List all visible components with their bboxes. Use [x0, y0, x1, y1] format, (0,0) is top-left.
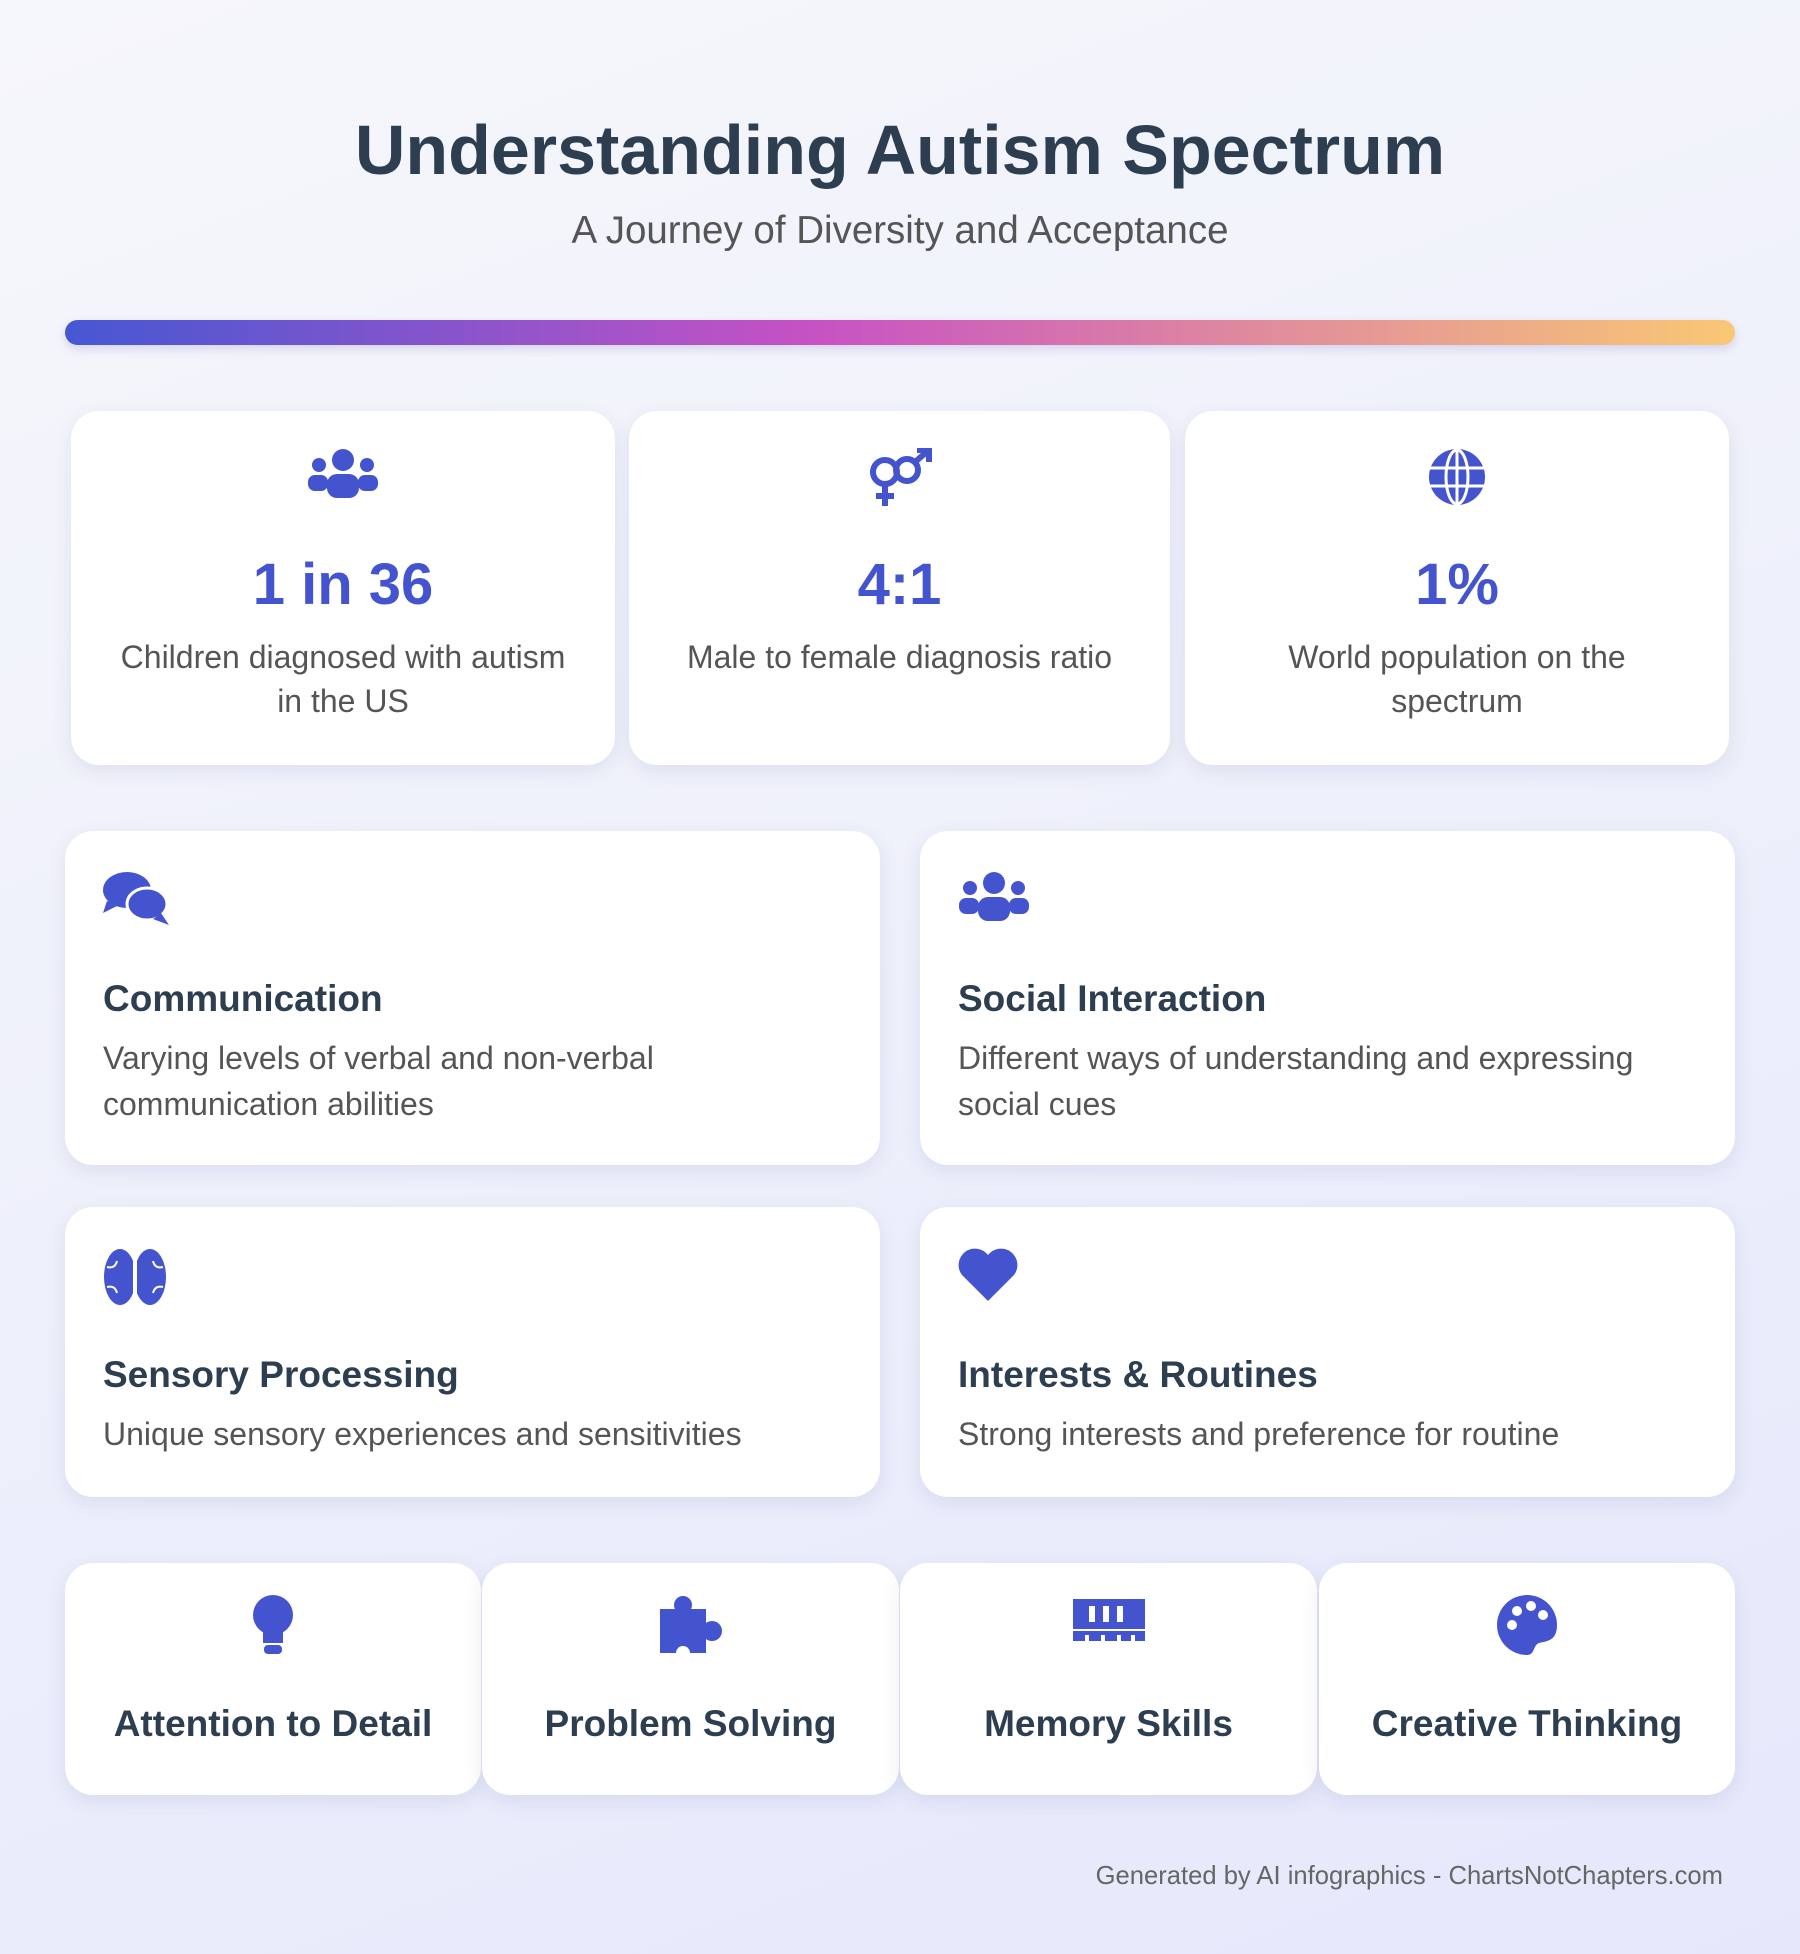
text: Unique sensory experiences and sensitivities	[103, 1416, 742, 1452]
strength card: problem solving	[482, 1563, 899, 1795]
label: Memory Skills	[984, 1703, 1233, 1744]
icon: lightbulb	[253, 1595, 293, 1654]
icon: memory chip	[1073, 1599, 1145, 1641]
feature card: sensory	[65, 1207, 880, 1497]
feature card: social	[920, 831, 1735, 1165]
footer: Generated by AI infographics - ChartsNotChapters.com	[1096, 1862, 1723, 1890]
text: Strong interests and preference for routine	[958, 1416, 1559, 1452]
text: Different ways of understanding and expressing social cues	[958, 1040, 1633, 1122]
icon: gender	[870, 448, 932, 506]
icon: puzzle	[660, 1596, 722, 1653]
stat card: 1 in 36	[71, 411, 615, 765]
icon: globe	[1429, 449, 1485, 505]
heading: Interests & Routines	[958, 1354, 1318, 1395]
strength card: memory	[900, 1563, 1317, 1795]
icon: people	[959, 872, 1029, 921]
number: 4:1	[858, 552, 941, 617]
number: 1%	[1415, 552, 1499, 617]
heading: Social Interaction	[958, 978, 1266, 1019]
feature card: communication	[65, 831, 880, 1165]
icon: brain	[104, 1249, 166, 1305]
description: Children diagnosed with autism in the US	[121, 639, 565, 719]
title: Understanding Autism Spectrum	[355, 111, 1445, 189]
icon: people	[308, 449, 378, 498]
label: Problem Solving	[545, 1703, 836, 1744]
stat card: 1%	[1185, 411, 1729, 765]
strength card: attention	[65, 1563, 481, 1795]
description: World population on the spectrum	[1288, 639, 1626, 719]
description: Male to female diagnosis ratio	[687, 639, 1112, 675]
label: Attention to Detail	[114, 1703, 432, 1744]
number: 1 in 36	[253, 552, 433, 617]
text: Varying levels of verbal and non-verbal communication abilities	[103, 1040, 654, 1122]
feature card: interests	[920, 1207, 1735, 1497]
icon: palette	[1497, 1595, 1557, 1655]
label: Creative Thinking	[1372, 1703, 1682, 1744]
icon: heart	[958, 1248, 1018, 1301]
heading: Sensory Processing	[103, 1354, 459, 1395]
icon: chat bubbles	[103, 872, 169, 925]
stat card: 4:1	[629, 411, 1170, 765]
strength card: creative	[1319, 1563, 1735, 1795]
gradient bar	[65, 320, 1735, 345]
heading: Communication	[103, 978, 383, 1019]
subtitle: A Journey of Diversity and Acceptance	[571, 209, 1228, 252]
